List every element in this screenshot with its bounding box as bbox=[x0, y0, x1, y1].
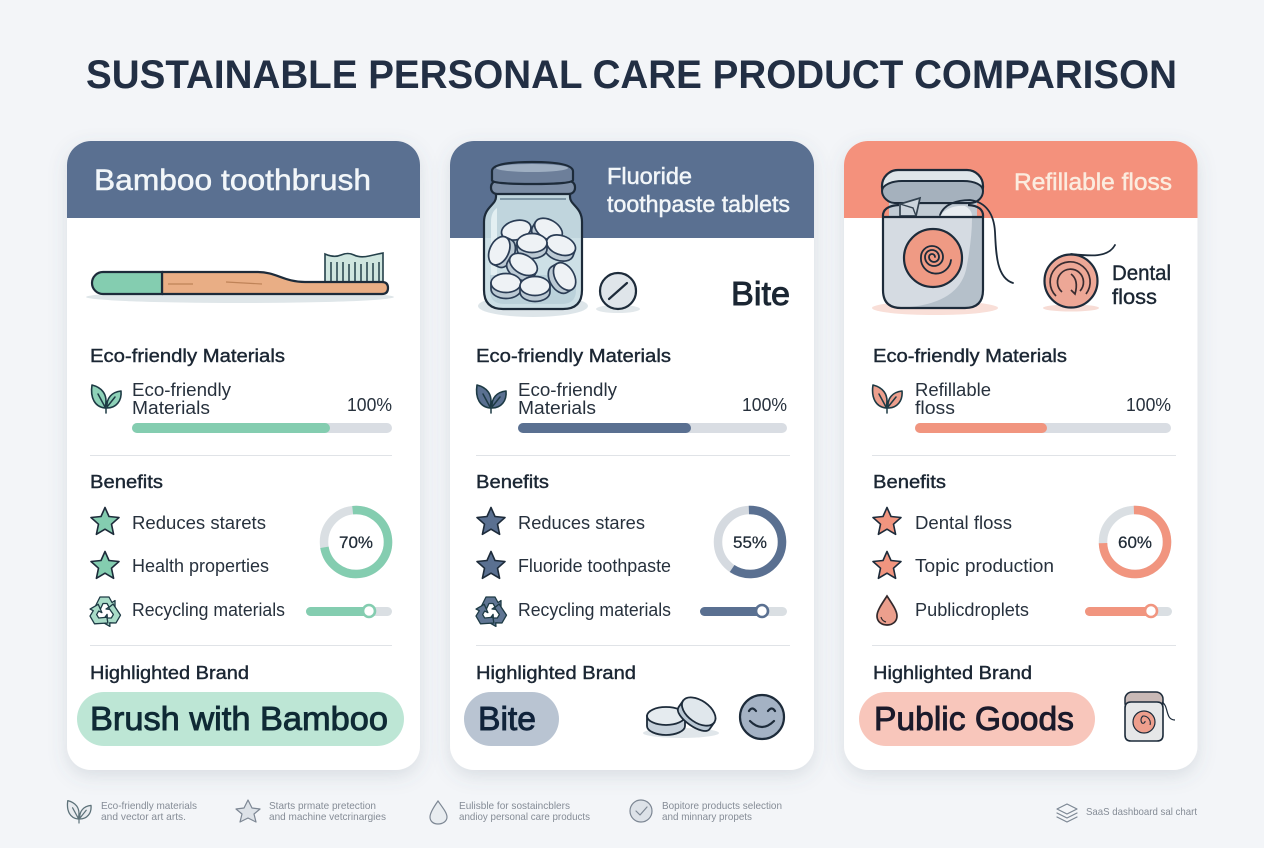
donut chart: 70%: 70% bbox=[339, 533, 373, 552]
heading: benefits: Benefits bbox=[873, 471, 946, 492]
footer legend: eco-friendly: Eco-friendly materials bbox=[101, 800, 197, 812]
heading: benefits: Benefits bbox=[476, 471, 549, 492]
icon: star bbox=[873, 508, 901, 534]
brand pill: brush with bamboo: Brush with Bamboo bbox=[90, 700, 388, 737]
footer legend: layers bbox=[1057, 804, 1197, 822]
label: refillable floss: Refillable bbox=[915, 379, 991, 400]
label: dental floss: Dental bbox=[1112, 262, 1171, 285]
label: dental floss: floss bbox=[1112, 286, 1157, 309]
footer legend: droplet: Eulisble for sostaincblers bbox=[459, 800, 570, 812]
slider bbox=[306, 605, 392, 617]
icon: tablets bbox=[643, 692, 721, 738]
benefit text: Fluoride toothpaste bbox=[518, 555, 671, 576]
header: refillable floss: Refillable floss bbox=[1014, 169, 1172, 196]
footer legend: star: and machine vetcrinargies bbox=[269, 811, 386, 823]
footer legend: eco-friendly: and vector art arts. bbox=[101, 811, 186, 823]
donut chart: 55% bbox=[717, 509, 783, 575]
panel: fluoride toothpaste tablets bbox=[450, 141, 814, 770]
panel: bamboo toothbrush bbox=[67, 141, 420, 770]
brand: bite: Bite bbox=[731, 275, 790, 312]
heading: highlighted brand: Highlighted Brand bbox=[90, 662, 249, 683]
label: refillable floss bbox=[915, 379, 991, 418]
benefit text: Topic production bbox=[915, 555, 1054, 576]
heading: highlighted brand: Highlighted Brand bbox=[873, 662, 1032, 683]
icon: floss container bbox=[872, 170, 1013, 315]
value: 100%: 100% bbox=[347, 394, 392, 415]
benefit text: Publicdroplets bbox=[915, 599, 1029, 620]
footer legend: check: and minnary propets bbox=[662, 811, 752, 823]
icon: star bbox=[477, 508, 505, 534]
donut chart: 60% bbox=[1102, 509, 1168, 575]
label: dental floss bbox=[1112, 262, 1171, 309]
icon: leaf bbox=[477, 385, 506, 413]
icon: smile bbox=[740, 695, 784, 739]
icon: leaf bbox=[92, 385, 121, 413]
icon: recycle bbox=[87, 597, 123, 629]
header: fluoride toothpaste tablets: Fluoride bbox=[607, 163, 692, 189]
footer legend: droplet: andioy personal care products bbox=[459, 811, 590, 823]
icon: dental floss spool bbox=[1043, 245, 1115, 312]
footer legend: droplet bbox=[430, 800, 590, 824]
footer legend: star: Starts prmate pretection bbox=[269, 800, 376, 812]
donut chart: 60%: 60% bbox=[1118, 533, 1152, 552]
icon: floss box bbox=[1125, 692, 1175, 741]
label: eco-friendly materials: Eco-friendly bbox=[132, 379, 232, 400]
donut chart: 70% bbox=[321, 507, 391, 577]
label: eco-friendly materials bbox=[132, 379, 232, 418]
label: eco-friendly materials: Materials bbox=[518, 397, 596, 418]
header: fluoride toothpaste tablets: toothpaste tablets bbox=[607, 191, 790, 217]
benefit text: Recycling materials bbox=[132, 599, 285, 620]
heading: benefits: Benefits bbox=[90, 471, 163, 492]
heading: eco-friendly materials: Eco-friendly Materials bbox=[873, 345, 1067, 366]
icon: droplet bbox=[877, 596, 897, 625]
progress bar bbox=[132, 423, 392, 433]
value: 100%: 100% bbox=[1126, 394, 1171, 415]
header: refillable floss bbox=[844, 141, 1198, 218]
footer legend: check bbox=[630, 800, 782, 823]
label: eco-friendly materials bbox=[518, 379, 618, 418]
footer legend: check: Bopitore products selection bbox=[662, 800, 782, 812]
benefit text: Dental floss bbox=[915, 512, 1012, 533]
benefit text: Reduces stares bbox=[518, 512, 645, 533]
icon: star bbox=[873, 552, 901, 578]
title: SUSTAINABLE PERSONAL CARE PRODUCT COMPARISON bbox=[86, 53, 1177, 97]
heading: eco-friendly materials: Eco-friendly Materials bbox=[476, 345, 671, 366]
icon: star bbox=[477, 552, 505, 578]
icon: single tablet bbox=[596, 273, 640, 313]
footer legend: eco-friendly bbox=[67, 800, 197, 823]
icon: leaf bbox=[873, 385, 902, 413]
label: eco-friendly materials: Materials bbox=[132, 397, 210, 418]
heading: eco-friendly materials: Eco-friendly Materials bbox=[90, 345, 285, 366]
donut chart: 55%: 55% bbox=[733, 533, 767, 552]
benefit text: Recycling materials bbox=[518, 599, 671, 620]
progress bar bbox=[518, 423, 787, 433]
progress bar bbox=[915, 423, 1171, 433]
header: bamboo toothbrush bbox=[67, 141, 420, 218]
icon: toothbrush bbox=[86, 253, 394, 303]
footer legend: star bbox=[236, 800, 386, 823]
slider bbox=[1085, 605, 1172, 617]
benefit text: Reduces starets bbox=[132, 512, 266, 533]
brand pill: brush with bamboo bbox=[77, 692, 404, 746]
header: fluoride toothpaste tablets bbox=[450, 141, 814, 238]
value: 100%: 100% bbox=[742, 394, 787, 415]
benefit text: Health properties bbox=[132, 555, 269, 576]
brand pill: public goods: Public Goods bbox=[874, 700, 1074, 737]
icon: recycle bbox=[473, 597, 509, 629]
brand pill: bite: Bite bbox=[478, 700, 536, 737]
header: bamboo toothbrush: Bamboo toothbrush bbox=[94, 164, 371, 197]
brand pill: public goods bbox=[859, 692, 1095, 746]
brand pill: bite bbox=[464, 692, 559, 746]
icon: star bbox=[91, 508, 119, 534]
icon: jar of tablets bbox=[478, 162, 588, 317]
slider bbox=[700, 605, 787, 617]
panel: refillable floss bbox=[844, 141, 1198, 770]
heading: highlighted brand: Highlighted Brand bbox=[476, 662, 636, 683]
footer legend: layers: SaaS dashboard sal chart bbox=[1086, 806, 1197, 818]
label: refillable floss: floss bbox=[915, 397, 955, 418]
icon: star bbox=[91, 552, 119, 578]
label: eco-friendly materials: Eco-friendly bbox=[518, 379, 618, 400]
